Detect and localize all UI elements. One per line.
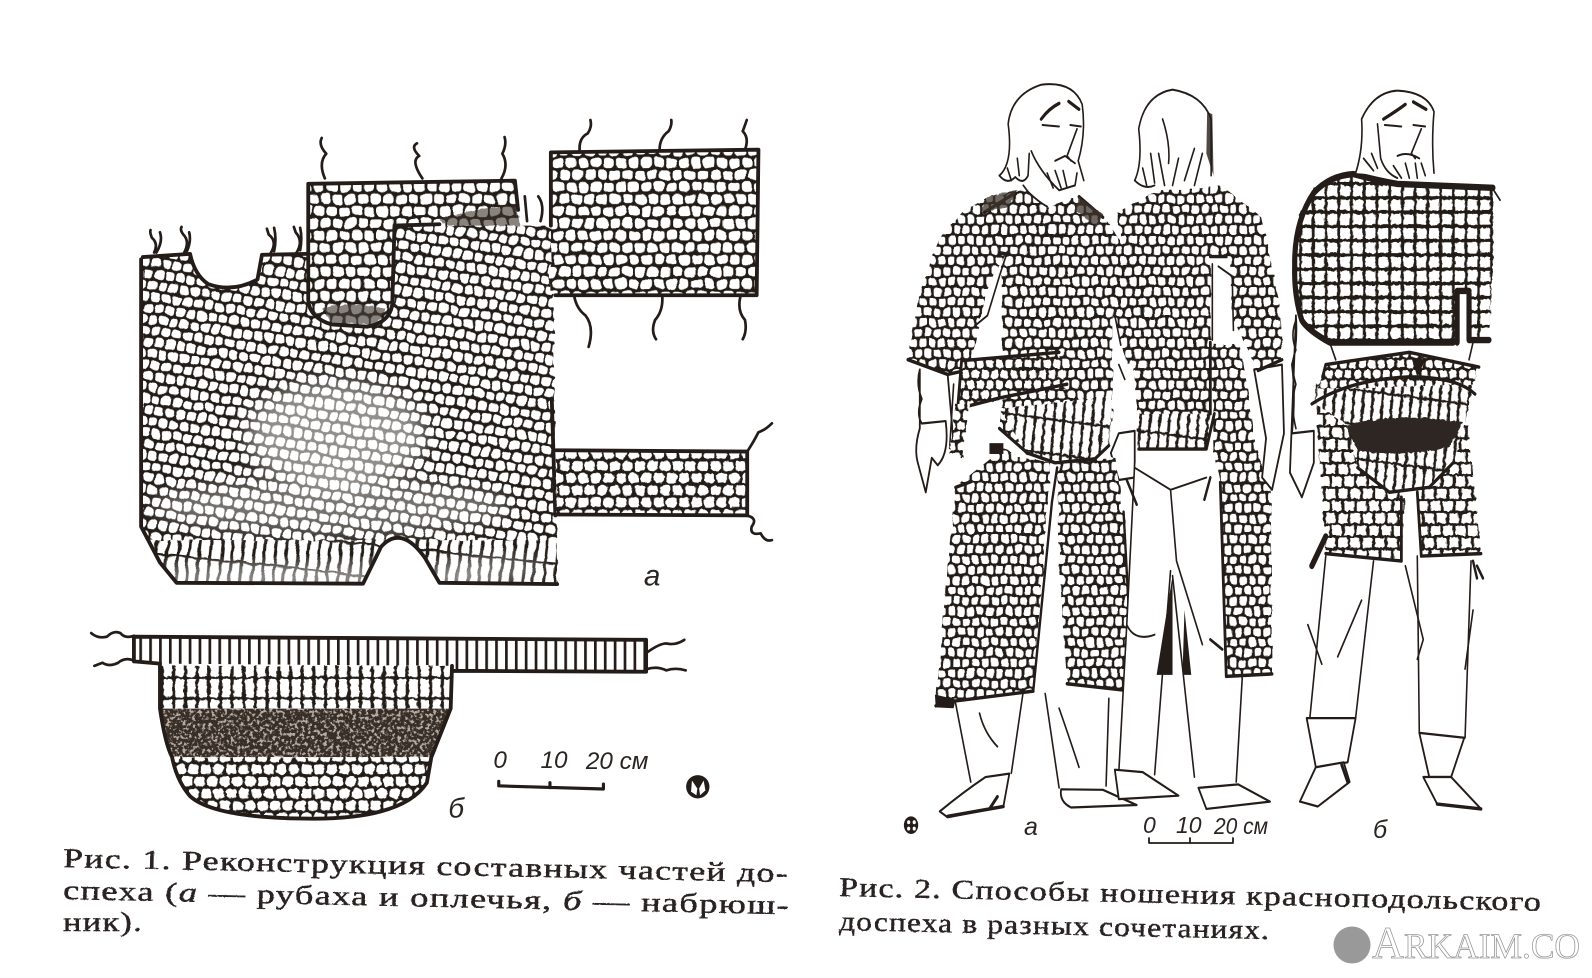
emblem bbox=[686, 775, 709, 798]
upper right panel bbox=[551, 120, 758, 347]
scale bar: 20 см bbox=[585, 748, 649, 775]
scale bar: 10 bbox=[541, 747, 568, 774]
label fig 2 b: б bbox=[1373, 816, 1388, 844]
figure middle back view bbox=[1115, 90, 1284, 809]
watermark: ARKAIM.CO bbox=[1372, 918, 1580, 968]
skirt b bbox=[1312, 404, 1483, 578]
figure 1: armour parts reconstruction bbox=[91, 120, 772, 823]
figure b bbox=[1290, 91, 1500, 809]
lower right panel bbox=[556, 423, 772, 541]
caption figure 2: Рис. 2. Способы ношения краснoподольского bbox=[839, 872, 1542, 917]
head b bbox=[1356, 91, 1434, 178]
right flap middle bbox=[1210, 343, 1284, 676]
label fig 2 a: а bbox=[1024, 813, 1038, 841]
shoulder piece bbox=[308, 137, 542, 327]
torso middle bbox=[1117, 185, 1282, 449]
tunic main body bbox=[125, 226, 561, 592]
emblem fig 2 bbox=[904, 816, 918, 834]
belt and apron bbox=[91, 632, 686, 819]
head a bbox=[999, 84, 1084, 206]
hand and cuff a bbox=[916, 370, 1135, 492]
legs middle bbox=[1115, 463, 1270, 809]
scale bar fig 2: 20 см bbox=[1213, 813, 1268, 839]
torso and sleeves a bbox=[908, 190, 1141, 463]
caption figure 2: доспеха в разных сочетаниях. bbox=[839, 906, 1270, 945]
caption figure 2 bbox=[839, 872, 1542, 945]
shoulder plate b bbox=[1295, 174, 1500, 343]
apron b bbox=[1312, 352, 1479, 492]
label b: б bbox=[448, 792, 465, 823]
caption figure 1: спеха ( а — рубаха и оплечья, б — набрюш- bbox=[63, 875, 790, 920]
legs and boots b bbox=[1300, 556, 1481, 809]
scale bar bbox=[493, 747, 649, 789]
label a: а bbox=[644, 559, 660, 592]
scale bar fig 2: 0 bbox=[1143, 812, 1156, 838]
scale bar: 0 bbox=[493, 747, 507, 774]
scale bar fig 2 bbox=[1143, 812, 1268, 843]
head middle bbox=[1135, 90, 1214, 190]
skirt a bbox=[935, 424, 1133, 708]
tunic ties bbox=[150, 227, 301, 253]
caption figure 1 bbox=[63, 843, 790, 937]
caption figure 1: ник). bbox=[63, 907, 143, 937]
figure 2: three figures wearing armour bbox=[904, 84, 1500, 834]
caption figure 1: Рис. 1. Реконструкция составных частей до- bbox=[63, 843, 789, 888]
trousers and shoes a bbox=[940, 691, 1137, 817]
scale bar fig 2: 10 bbox=[1176, 812, 1202, 838]
figure a front view bbox=[908, 84, 1141, 817]
arm b bbox=[1290, 316, 1473, 497]
